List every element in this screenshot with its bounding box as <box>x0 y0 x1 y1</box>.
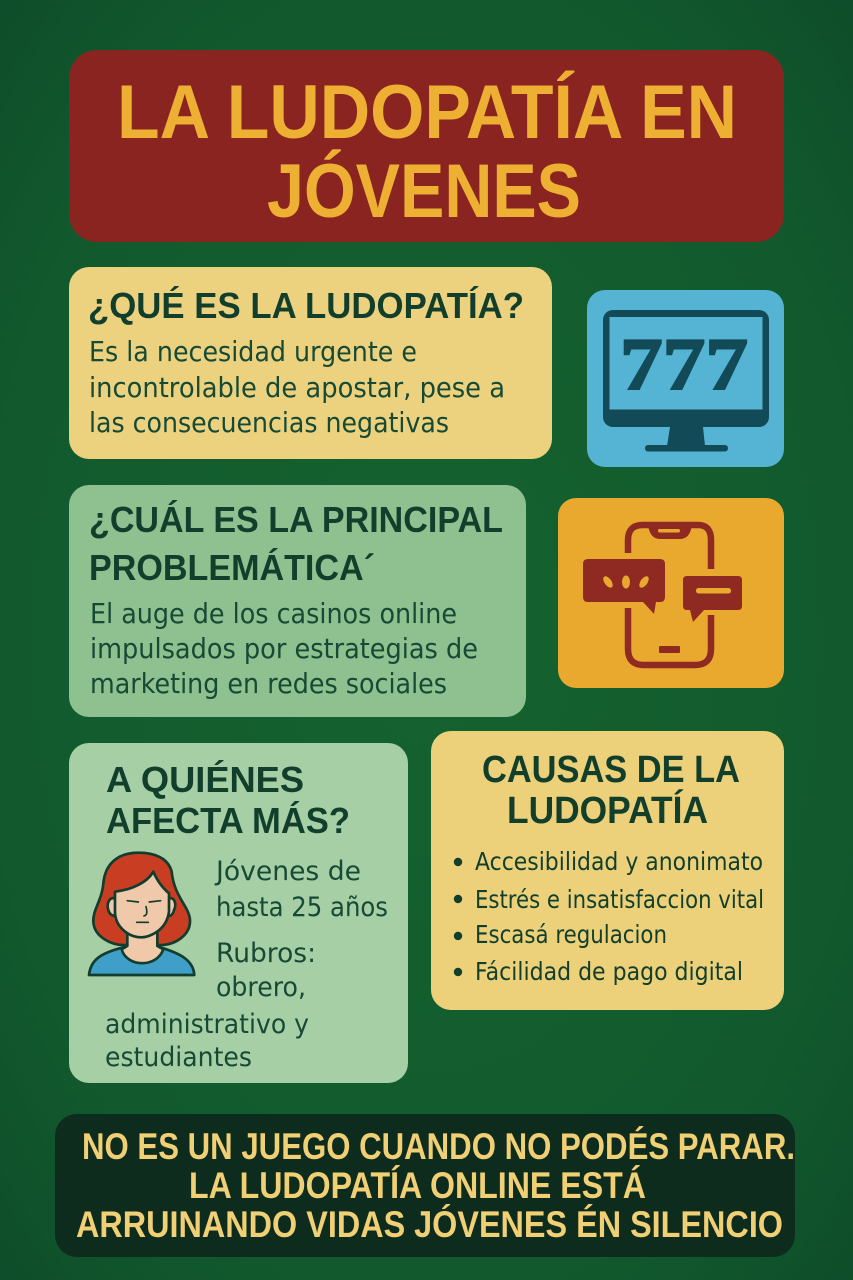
icon: monitor 777 <box>587 290 784 467</box>
list: causas: Accesibilidad y anonimato <box>475 847 763 876</box>
text: definición: Es la necesidad urgente e <box>89 335 417 368</box>
text: closing message: LA LUDOPATÍA ONLINE ESTÁ <box>189 1165 646 1206</box>
list: causas: Estrés e insatisfaccion vital <box>475 885 764 914</box>
text: jóvenes y rubros: hasta 25 años <box>216 892 388 923</box>
text: jóvenes y rubros: administrativo y <box>105 1009 309 1040</box>
panel: closing message <box>55 1114 795 1257</box>
text: jóvenes y rubros: Jóvenes de <box>214 856 361 887</box>
heading: qué es: ¿QUÉ ES LA LUDOPATÍA? <box>88 285 524 326</box>
list: causas: Fácilidad de pago digital <box>475 957 743 986</box>
text: auge de casinos online: marketing en redes sociales <box>90 667 447 700</box>
heading: problemática: PROBLEMÁTICA´ <box>89 547 375 588</box>
panel: causas de la ludopatía <box>431 731 784 1010</box>
heading: a quiénes <box>106 759 350 841</box>
panel: qué es la ludopatía <box>69 267 552 459</box>
heading: causas: LUDOPATÍA <box>507 788 708 832</box>
title text: JÓVENES <box>267 149 581 234</box>
text: auge de casinos online: El auge de los casinos online <box>90 597 457 630</box>
text: auge de casinos online <box>90 597 478 700</box>
text: definición: incontrolable de apostar, pese a <box>89 371 505 404</box>
text: jóvenes y rubros: Rubros: <box>216 938 316 969</box>
icon: monitor 777: 777 <box>620 324 748 406</box>
text: auge de casinos online: impulsados por estrategias de <box>90 632 478 665</box>
list: causas <box>454 847 764 986</box>
heading: problemática <box>89 499 503 588</box>
title text <box>117 70 737 234</box>
panel: principal problemática <box>69 485 526 717</box>
heading: causas: CAUSAS DE LA <box>482 749 740 791</box>
icon: phone with chat bubbles <box>558 498 784 688</box>
text: jóvenes y rubros: obrero, <box>216 972 306 1003</box>
heading: problemática: ¿CUÁL ES LA PRINCIPAL <box>89 499 503 540</box>
title text: LA LUDOPATÍA EN <box>117 70 737 155</box>
text: jóvenes y rubros <box>105 856 388 1073</box>
heading: a quiénes: AFECTA MÁS? <box>106 800 350 841</box>
heading: a quiénes: A QUIÉNES <box>106 759 304 800</box>
text: definición: las consecuencias negativas <box>89 406 449 439</box>
heading: causas <box>482 749 740 832</box>
title banner <box>69 50 784 242</box>
icon: young woman <box>89 853 194 975</box>
panel: a quiénes afecta más <box>69 743 408 1083</box>
list: causas: Escasá regulacion <box>475 920 667 949</box>
text: jóvenes y rubros: estudiantes <box>105 1042 252 1073</box>
text: closing message <box>76 1126 795 1245</box>
text: definición <box>89 335 505 439</box>
